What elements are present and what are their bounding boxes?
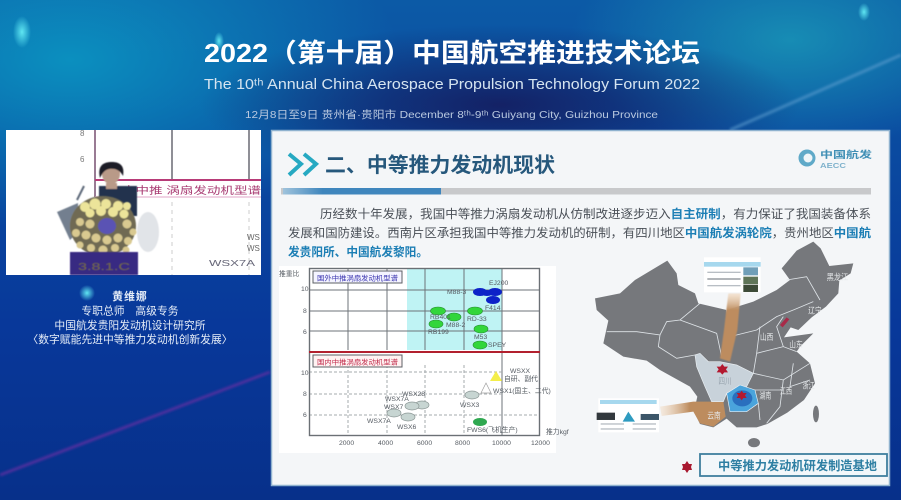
map: Sichuan — [695, 353, 753, 402]
map labels: 四川 — [718, 376, 732, 386]
chart labels: FWS6(飞机生产) — [467, 425, 518, 434]
title: 2022（第十届）中国航空推进技术论坛 — [204, 38, 700, 68]
chart labels: WSX3 — [460, 402, 479, 409]
map labels: 山西 — [760, 332, 774, 342]
chart labels: 10000 — [492, 440, 511, 447]
body text: 历经数十年发展，我国中等推力涡扇发动机从仿制改进逐步迈入 自主研制，有力保证了我国装备体系 — [320, 206, 871, 221]
projected chart behind speaker: WSX7A — [209, 259, 256, 268]
slide heading: 二、中等推力发动机现状 — [325, 154, 556, 177]
header bar — [281, 188, 871, 194]
flower arrangement — [57, 196, 159, 256]
data point: production — [473, 418, 487, 426]
speaker caption — [27, 289, 233, 346]
body text: 发展和国防建设。西南片区承担我国中等推力发动机的研制，有四川地区 中国航发涡轮院，贵州地区中国航 — [288, 225, 871, 240]
lectern — [70, 252, 138, 275]
logo: AECC: AECC — [820, 163, 846, 170]
chart labels: RD-33 — [467, 316, 487, 323]
date and place: 12月8日至9日 贵州省·贵阳市 December 8ᵗʰ-9ᵗʰ Guiyang City, Guizhou Province — [245, 108, 658, 121]
lectern: 3.8.1.C — [78, 262, 130, 273]
chart labels: SPEY — [488, 342, 507, 349]
data points: green — [429, 307, 488, 349]
speaker caption: 〈数字赋能先进中等推力发动机创新发展〉 — [27, 332, 233, 346]
chart labels: WSXX — [510, 368, 530, 375]
chart labels: 8 — [303, 391, 307, 398]
legend: manufacturing base: 中等推力发动机研发制造基地 — [718, 458, 877, 473]
map: tan band west — [660, 402, 726, 427]
panel: slide — [272, 130, 890, 486]
projected chart behind speaker: WS — [247, 244, 260, 253]
chart labels: WSX1(国主、二代) — [493, 386, 551, 395]
map: province borders — [607, 277, 820, 423]
map labels: 辽宁 — [808, 304, 822, 315]
icon: red star Sichuan — [717, 364, 728, 375]
logo: AECC: 中国航发 — [820, 149, 873, 161]
chart labels: WSX7A — [367, 418, 391, 425]
chart labels: 10 — [301, 370, 309, 377]
projected chart behind speaker: 6 — [80, 155, 85, 164]
chart labels: 8 — [303, 308, 307, 315]
projected chart behind speaker: 内中推 涡扇发动机型谱 — [122, 184, 261, 197]
inset: north document — [704, 257, 761, 292]
map labels: 云南 — [707, 409, 721, 420]
projected chart behind speaker — [80, 129, 261, 275]
map labels: 黑龙江 — [827, 271, 849, 282]
icon: legend star — [682, 461, 692, 473]
legend: manufacturing base — [682, 454, 887, 476]
chart labels: WSX7 — [384, 404, 403, 411]
projected chart behind speaker: 8 — [80, 129, 85, 138]
data points: grey — [387, 391, 479, 421]
legend: foreign engines — [313, 271, 402, 283]
chart labels: 6 — [303, 412, 307, 419]
inset: southwest document — [597, 398, 659, 432]
data point: outlined triangle — [481, 383, 491, 393]
chart labels: WSX7A — [385, 396, 409, 403]
subtitle: The 10ᵗʰ Annual China Aerospace Propulsion Technology Forum 2022 — [204, 77, 700, 93]
chart labels: 12000 — [531, 440, 550, 447]
map: Taiwan — [813, 406, 819, 422]
chart labels: WSX28 — [402, 391, 425, 398]
chart labels: 2000 — [339, 440, 354, 447]
map of China — [595, 242, 853, 447]
body text: 发贵阳所、中国航发黎阳。 — [288, 244, 428, 259]
chart labels: M53 — [474, 334, 487, 341]
speaker — [77, 162, 137, 216]
chart labels: 自研、副代 — [504, 374, 538, 383]
map: Guizhou — [727, 385, 758, 412]
chart labels: RB199 — [428, 329, 449, 336]
logo: AECC — [798, 149, 873, 170]
speaker caption: 中国航发贵阳发动机设计研究所 — [54, 318, 206, 332]
map: Hainan — [748, 438, 760, 447]
legend: foreign engines: 国外中推涡扇发动机型谱 — [317, 274, 398, 282]
panel: speaker video — [6, 129, 261, 275]
map labels: 浙江 — [803, 379, 815, 390]
data points: blue — [473, 288, 502, 304]
map labels: 江西 — [780, 386, 792, 396]
chart labels: EJ200 — [489, 280, 508, 287]
data point: yellow triangle — [490, 371, 502, 381]
map landmass — [595, 242, 853, 427]
speaker caption: 专职总师 高级专务 — [81, 304, 179, 318]
map labels: 湖南 — [759, 389, 772, 400]
legend: domestic engines: 国内中推涡扇发动机型谱 — [317, 358, 398, 366]
chart labels: RB401 — [430, 314, 451, 321]
legend: domestic engines — [313, 355, 402, 367]
map labels — [707, 271, 849, 420]
chart labels: 6000 — [417, 440, 432, 447]
chart labels: F414 — [485, 305, 501, 312]
projected chart behind speaker: WS — [247, 233, 260, 242]
body text — [288, 206, 871, 259]
chart labels: 8000 — [455, 440, 470, 447]
map: tan band north — [720, 293, 741, 362]
icon: red star Guizhou — [737, 391, 747, 400]
speaker caption: 黄维娜 — [112, 289, 148, 303]
map labels: 山东 — [789, 338, 803, 349]
chart labels: 10 — [301, 286, 309, 293]
icon: chevrons — [289, 154, 316, 175]
chart labels: M88-2 — [446, 322, 465, 329]
chart labels: 6 — [303, 329, 307, 336]
chart: thrust-weight ratio vs thrust — [279, 266, 569, 453]
chart labels: 4000 — [378, 440, 393, 447]
chart labels: 推重比 — [279, 269, 300, 278]
chart labels: WSX6 — [397, 424, 416, 431]
chart labels: M88-3 — [447, 289, 466, 296]
map: Beijing marker — [780, 317, 789, 327]
chart labels — [279, 269, 569, 447]
chart labels: 推力kgf — [546, 427, 569, 436]
